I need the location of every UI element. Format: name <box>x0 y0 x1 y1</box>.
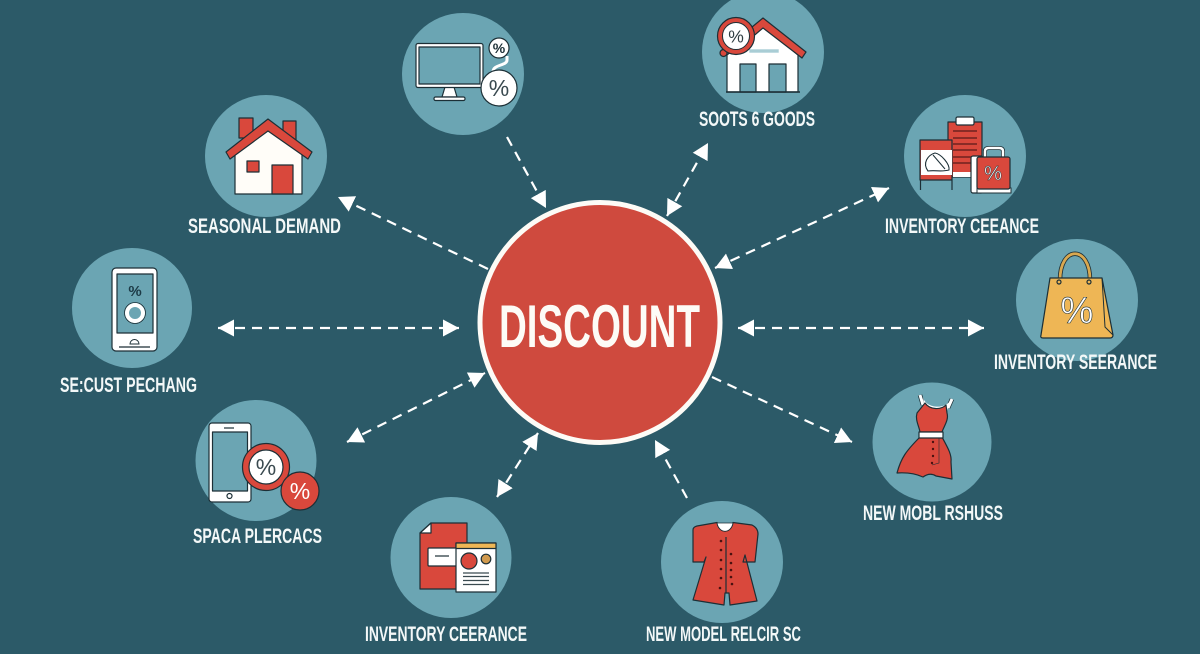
heading: discount: DISCOUNT <box>499 293 700 360</box>
icon: smartphone with percent <box>112 268 157 351</box>
icon: monitor with percent tags <box>416 38 517 106</box>
icon: shopping bag with percent <box>1041 254 1113 338</box>
label: NEW MODEL RELCIR SC <box>646 623 801 646</box>
node: inventory seerance <box>994 239 1157 374</box>
central discount badge <box>480 202 720 442</box>
node: spaca plercacs <box>193 400 322 548</box>
label: SEASONAL DEMAND <box>188 215 341 238</box>
arrow: soots and goods two-way <box>667 143 708 216</box>
icon: shopping bag with percent: % <box>1061 290 1093 331</box>
icon: red dress <box>897 395 952 479</box>
label: SOOTS 6 GOODS <box>699 108 815 131</box>
node: new model rshuss <box>863 382 1003 525</box>
arrow: discount to dress <box>712 377 852 442</box>
icon: phone with percent badges: % <box>290 478 310 504</box>
icon: smartphone with percent: % <box>128 283 142 300</box>
label: NEW MOBL RSHUSS <box>863 502 1003 525</box>
arrow: monitor to discount <box>507 137 546 208</box>
label: INVENTORY CEEANCE <box>885 215 1039 238</box>
arrow: seasonal demand <box>338 197 488 269</box>
node: monitor <box>402 13 524 135</box>
arrow: lower-left two-way <box>347 373 485 442</box>
node: phone <box>60 248 197 397</box>
icon: shop with percent magnifier: % <box>728 26 744 46</box>
arrow: right horizontal two-way <box>738 327 984 329</box>
icon: house <box>226 118 312 194</box>
node: soots and goods <box>699 0 824 131</box>
node: seasonal demand <box>188 95 341 238</box>
label: INVENTORY CEERANCE <box>365 623 527 646</box>
icon: clipboard, sign and bag <box>920 117 1011 193</box>
arrow: shirt to discount <box>655 440 687 498</box>
arrow: left horizontal two-way <box>218 327 459 329</box>
label: SE:CUST PECHANG <box>60 374 197 397</box>
icon: clipboard, sign and bag: % <box>984 163 1002 185</box>
node: inventory ceerance <box>365 497 527 646</box>
icon: monitor with percent tags: % <box>493 40 506 56</box>
icon: monitor with percent tags: % <box>489 75 509 101</box>
label: SPACA PLERCACS <box>193 525 322 548</box>
node: new model release <box>646 501 801 646</box>
node: inventory ceeance <box>885 95 1039 238</box>
icon: documents <box>420 523 496 592</box>
arrow: upper-right two-way <box>715 188 889 268</box>
icon: phone with percent badges: % <box>256 454 276 480</box>
arrow: bottom-left two-way <box>497 433 538 497</box>
icon: red jacket <box>693 522 758 605</box>
icon: phone with percent badges <box>209 423 319 510</box>
